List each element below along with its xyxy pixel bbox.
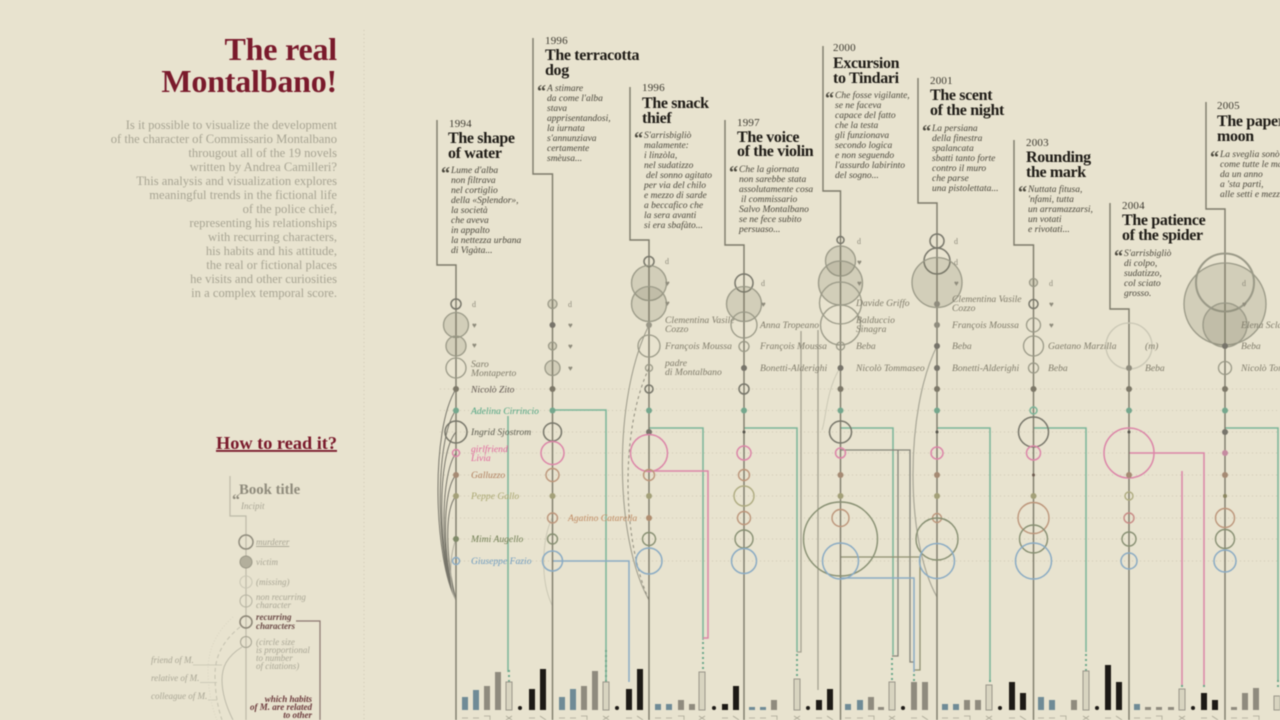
book 2004: The patience of the spider: S'arrisbigliò — [1124, 249, 1172, 259]
relationship arcs — [438, 325, 937, 605]
book 1996: The terracotta dog: Agatino Catarella — [567, 513, 637, 524]
book 2000: Excursion to Tindari: to Tindari — [833, 70, 900, 87]
book 1996: The snack thief: e mezzo di sarde — [644, 191, 707, 201]
book 2000: Excursion to Tindari: d — [857, 237, 861, 246]
book 1994: The shape of water: d — [472, 300, 476, 309]
legend: how to read diagram: which habits — [265, 694, 312, 704]
book 2001: The scent of the night: sbatti tanto forte — [932, 153, 995, 164]
book 1996: The snack thief: malamente: — [644, 141, 689, 151]
book 2001: The scent of the night: La persiana — [931, 124, 978, 134]
title: The real — [225, 31, 337, 67]
legend: how to read diagram: of citations) — [256, 661, 299, 671]
book 1996: The snack thief: Clementina Vasile — [665, 315, 735, 326]
book 1996: The snack thief: del sonno agitato — [646, 171, 712, 181]
book 2005: The paper moon — [1184, 100, 1280, 720]
book 1994: The shape of water: ♥ — [472, 321, 477, 330]
book 1997: The voice of the violin: d — [761, 279, 765, 288]
book 2000: Excursion to Tindari: Che fosse vigilante, — [835, 90, 910, 101]
book 2004: The patience of the spider: col sciato — [1124, 279, 1161, 289]
book 2001: The scent of the night: d — [954, 237, 958, 246]
intro text block: meaningful trends in the fictional life — [149, 188, 337, 202]
intro text block: of the police chief, — [243, 202, 337, 216]
book 2003: Rounding the mark: the mark — [1026, 164, 1086, 181]
legend: how to read diagram: characters — [256, 621, 295, 631]
book 1997: The voice of the violin: Che la giornata — [739, 165, 799, 175]
book 1996: The snack thief — [630, 82, 735, 720]
book 1996: The terracotta dog: ♥ — [568, 364, 573, 373]
book 1997: The voice of the violin: The voice — [737, 129, 799, 146]
book 1994: The shape of water: Lume d'alba — [450, 166, 498, 176]
intro text block: representing his relationships — [189, 216, 337, 230]
bars: book 1997 — [749, 679, 833, 710]
book 2000: Excursion to Tindari: Beba — [856, 341, 876, 352]
title: Montalbano! — [161, 63, 337, 99]
book 2001: The scent of the night: of the night — [930, 102, 1005, 119]
intro text block: througout all of the 19 novels — [188, 146, 337, 160]
book 1994: The shape of water: della «Splendor», — [451, 196, 519, 206]
intro text block: Is it possible to visualize the development — [126, 118, 337, 132]
book 1994: The shape of water: Giuseppe Fazio — [471, 556, 532, 567]
book 1994: The shape of water: che aveva — [451, 216, 489, 226]
book 1996: The terracotta dog: dog — [545, 62, 569, 79]
book 1996: The snack thief: padre — [664, 358, 688, 369]
bars: book 2001 — [942, 682, 1026, 710]
book 1994: The shape of water: Saro — [471, 359, 489, 370]
book 2003: Rounding the mark: un arramazzarsi, — [1028, 205, 1093, 215]
bars: book 2005 — [1231, 688, 1280, 710]
book 1996: The snack thief: François Moussa — [664, 341, 732, 352]
book 2000: Excursion to Tindari: gli funzionava — [835, 130, 889, 141]
book 2004: The patience of the spider: of the spider — [1122, 227, 1203, 244]
book 2001: The scent of the night: d — [954, 258, 958, 267]
book 2004: The patience of the spider: Beba — [1145, 363, 1165, 374]
book 1996: The snack thief: 1996 — [642, 82, 665, 94]
book 2000: Excursion to Tindari: “ — [825, 88, 834, 108]
book 1994: The shape of water: The shape — [448, 130, 515, 147]
bars: book 1996 snack — [655, 672, 739, 710]
heading: how to read it: How to read it? — [216, 433, 337, 453]
book 1994: The shape of water: girlfriend — [471, 444, 508, 455]
book 2000: Excursion to Tindari: Sinagra — [856, 324, 887, 335]
book 1996: The snack thief: ♥ — [665, 299, 670, 308]
book 2001: The scent of the night: ♥ — [954, 279, 959, 288]
book 1996: The terracotta dog: apprisentandosi, — [547, 114, 611, 124]
book 1994: The shape of water: Mimi Augello — [470, 534, 524, 545]
intro text block: the real or fictional places — [206, 258, 337, 272]
bars: book 1996 terracotta — [559, 669, 643, 710]
book 2003: Rounding the mark: d — [1049, 279, 1053, 288]
book 1996: The snack thief: a beccafico che — [644, 200, 703, 211]
book 1994: The shape of water: non filtrava — [451, 175, 496, 186]
book 1994: The shape of water: di Vigàta... — [451, 246, 493, 256]
bar category icons — [462, 716, 1259, 720]
book 2003: Rounding the mark: ♥ — [1049, 321, 1054, 330]
book 2004: The patience of the spider — [1104, 200, 1206, 720]
book 1997: The voice of the violin: il commissario — [741, 195, 797, 205]
bars: book 2000 — [845, 682, 928, 710]
book 1996: The snack thief: d — [665, 257, 669, 266]
book 2005: The paper moon: 2005 — [1217, 100, 1240, 112]
intro text block: of the character of Commissario Montalbano — [111, 132, 337, 146]
book 2000: Excursion to Tindari: Davide Griffo — [855, 298, 910, 309]
legend: how to read diagram: is proportional — [256, 645, 310, 655]
book 1997: The voice of the violin: se ne fece subito — [739, 214, 802, 225]
book 1994: The shape of water: Adelina Cirrincio — [470, 406, 539, 417]
book 1994: The shape of water: la società — [451, 206, 488, 216]
book 2001: The scent of the night: Beba — [952, 341, 972, 352]
book 2005: The paper moon: “ — [1210, 147, 1219, 167]
legend: how to read diagram: (circle size — [256, 637, 295, 647]
book 1997: The voice of the violin: persuaso... — [738, 225, 780, 235]
book 1996: The terracotta dog: A stimare — [546, 84, 583, 94]
legend: how to read diagram: (missing) — [256, 577, 290, 587]
intro text block: in a complex temporal score. — [191, 286, 337, 300]
legend: how to read diagram: “ — [232, 492, 240, 509]
book 2003: Rounding the mark: Gaetano Marzilla — [1048, 341, 1117, 352]
book 2003: Rounding the mark: Nuttata fitusa, — [1027, 184, 1082, 195]
book 1997: The voice of the violin — [725, 117, 827, 720]
book 1997: The voice of the violin: François Moussa — [759, 341, 827, 352]
book 2001: The scent of the night: Bonetti-Alderighi — [952, 363, 1019, 374]
book 2001: The scent of the night: della finestra — [932, 133, 983, 144]
book 2003: Rounding the mark — [1014, 137, 1117, 720]
book 1997: The voice of the violin: “ — [729, 162, 738, 182]
book 1996: The terracotta dog: stava — [547, 104, 567, 114]
book 2003: Rounding the mark: 'nfami, tutta — [1028, 194, 1074, 205]
book 1997: The voice of the violin: Anna Tropeano — [759, 320, 819, 331]
book 2001: The scent of the night: François Moussa — [951, 320, 1019, 331]
book 2000: Excursion to Tindari: secondo logica — [835, 141, 893, 151]
book 2000: Excursion to Tindari — [804, 42, 925, 720]
intro text block: his habits and his attitude, — [206, 244, 337, 258]
legend: how to read diagram: Incipit — [240, 501, 265, 511]
book 1997: The voice of the violin: non sarebbe stata — [739, 175, 806, 185]
book 1996: The snack thief: si era sbafàto... — [644, 220, 703, 231]
book 1994: The shape of water: nel cortiglio — [451, 186, 498, 196]
book 1996: The snack thief: The snack — [642, 95, 709, 112]
book 1994: The shape of water: “ — [441, 163, 450, 183]
connector lines to bar charts — [508, 330, 1278, 690]
book 2000: Excursion to Tindari: ♥ — [857, 279, 862, 288]
book 2000: Excursion to Tindari: capace del fatto — [835, 110, 896, 121]
book 2001: The scent of the night: Clementina Vasile — [952, 294, 1022, 305]
book 2003: Rounding the mark: 2003 — [1026, 137, 1049, 149]
book 2004: The patience of the spider: “ — [1114, 246, 1123, 266]
legend: how to read diagram: friend of M. — [151, 655, 194, 665]
book 1994: The shape of water: of water — [448, 145, 502, 162]
book 2004: The patience of the spider: The patience — [1122, 212, 1206, 229]
book 1996: The terracotta dog: smèusa... — [547, 154, 582, 164]
intro text block — [111, 118, 337, 300]
intro text block: he visits and other curiosities — [190, 272, 337, 286]
bars: book 1994 — [462, 669, 546, 710]
book 1997: The voice of the violin: 1997 — [737, 117, 760, 129]
book 1994: The shape of water — [437, 118, 539, 720]
book 2003: Rounding the mark: e rivotati... — [1028, 225, 1070, 235]
book 2001: The scent of the night: una pistolettata... — [932, 184, 998, 194]
book 2001: The scent of the night: 2001 — [930, 75, 953, 87]
book 1996: The terracotta dog: da come l'alba — [547, 94, 603, 104]
book 1996: The terracotta dog: The terracotta — [545, 47, 640, 64]
book 1996: The terracotta dog: 1996 — [545, 35, 568, 47]
book 1996: The snack thief: nel sudatizzo — [644, 161, 694, 171]
book 1994: The shape of water: Livia — [470, 453, 491, 464]
book 1996: The snack thief: “ — [634, 128, 643, 148]
legend: how to read diagram: of M. are related — [250, 702, 312, 712]
book 1996: The terracotta dog: “ — [537, 81, 546, 101]
book 1997: The voice of the violin: Salvo Montalbano — [739, 205, 809, 215]
row guide lines — [440, 389, 1280, 561]
book 1997: The voice of the violin: Bonetti-Alderighi — [760, 363, 827, 374]
book 2000: Excursion to Tindari: se ne faceva — [835, 100, 882, 111]
intro text block: with recurring characters, — [208, 230, 337, 244]
book 1994: The shape of water: Nicolò Zito — [470, 384, 515, 396]
book 1997: The voice of the violin: assolutamente cosa — [739, 185, 813, 195]
legend: how to read diagram: recurring — [256, 612, 292, 622]
book 1994: The shape of water: Galluzzo — [471, 470, 505, 481]
bars: book 2004 — [1134, 689, 1218, 710]
book 2004: The patience of the spider: sudatizzo, — [1124, 269, 1162, 279]
intro text block: written by Andrea Camilleri? — [190, 160, 337, 174]
book 2005: The paper moon: Beba — [1241, 341, 1261, 352]
book 2000: Excursion to Tindari: ♥ — [857, 258, 862, 267]
book 1994: The shape of water: Montaperto — [470, 368, 517, 379]
book 2001: The scent of the night: “ — [922, 121, 931, 141]
book 1996: The terracotta dog — [533, 35, 640, 720]
intro text block: This analysis and visualization explores — [136, 174, 337, 188]
book 2000: Excursion to Tindari: e non seguendo — [835, 151, 894, 161]
book 2004: The patience of the spider: grosso. — [1124, 289, 1151, 299]
book 1994: The shape of water: ♥ — [472, 341, 477, 350]
legend: how to read diagram: to other — [283, 710, 312, 720]
book 2005: The paper moon: d — [1242, 279, 1246, 288]
legend: how to read diagram: murderer — [256, 537, 290, 547]
book 1996: The snack thief: thief — [642, 110, 672, 127]
book 1996: The snack thief: S'arrisbigliò — [644, 131, 692, 141]
legend: how to read diagram: Book title — [239, 482, 301, 498]
legend: how to read diagram: character — [256, 600, 291, 610]
book 2005: The paper moon: a 'sta parti, — [1220, 180, 1263, 190]
bar charts at the foot of each book — [462, 665, 1280, 720]
book 1994: The shape of water: 1994 — [449, 118, 472, 130]
book 1996: The snack thief: i linzòla, — [644, 151, 677, 161]
book 1996: The snack thief: di Montalbano — [665, 367, 722, 378]
book 2005: The paper moon: moon — [1217, 128, 1254, 145]
book 1996: The terracotta dog: ♥ — [568, 321, 573, 330]
book 2004: The patience of the spider: 2004 — [1122, 200, 1145, 212]
book 2000: Excursion to Tindari: che la testa — [835, 121, 879, 131]
book 2000: Excursion to Tindari: Balduccio — [856, 315, 895, 326]
book 1996: The snack thief: per via del chilo — [643, 181, 706, 191]
legend: how to read diagram — [151, 476, 320, 720]
book 1996: The snack thief: ♥ — [665, 279, 670, 288]
book 2000: Excursion to Tindari: del sogno... — [835, 171, 879, 181]
book 2001: The scent of the night: Cozzo — [952, 303, 976, 314]
book 1997: The voice of the violin: ♥ — [761, 300, 766, 309]
book 2000: Excursion to Tindari: Nicolò Tommaseo — [855, 363, 925, 374]
book 1994: The shape of water: la nettezza urbana — [451, 236, 521, 246]
book 2001: The scent of the night: spalancata — [932, 144, 974, 154]
book 2004: The patience of the spider: di colpo, — [1124, 259, 1157, 269]
book 1994: The shape of water: Ingrid Sjostrom — [470, 427, 531, 438]
bars: book 2003 — [1038, 665, 1122, 710]
book 2003: Rounding the mark: Beba — [1048, 363, 1068, 374]
book 2000: Excursion to Tindari: Excursion — [833, 55, 900, 72]
book 1996: The terracotta dog: ♥ — [568, 342, 573, 351]
book 2005: The paper moon: ♥ — [1242, 300, 1247, 309]
legend: how to read diagram: to number — [256, 653, 293, 663]
book 1996: The snack thief: Cozzo — [665, 324, 689, 335]
book 2001: The scent of the night — [912, 75, 1022, 720]
title — [161, 31, 337, 99]
legend: how to read diagram: non recurring — [256, 592, 306, 602]
book 2003: Rounding the mark: Rounding — [1026, 149, 1091, 166]
book 2003: Rounding the mark: ♥ — [1049, 300, 1054, 309]
book 2003: Rounding the mark: un votati — [1028, 215, 1062, 225]
book 1996: The terracotta dog: d — [568, 300, 572, 309]
book 1996: The terracotta dog: s'annunziava — [547, 134, 597, 144]
book 1997: The voice of the violin: of the violin — [737, 143, 814, 160]
book 2004: The patience of the spider: (m) — [1145, 341, 1158, 352]
legend: how to read diagram: relative of M. — [151, 673, 199, 683]
book 1994: The shape of water: in appalto — [451, 226, 490, 236]
book 1996: The snack thief: la sera avanti — [644, 211, 697, 221]
book 1994: The shape of water: Peppe Gallo — [470, 491, 519, 502]
book 1996: The terracotta dog: la iurnata — [547, 124, 585, 134]
legend: how to read diagram: colleague of M. — [151, 691, 207, 701]
book 2003: Rounding the mark: “ — [1018, 182, 1027, 202]
book 2000: Excursion to Tindari: 2000 — [833, 42, 856, 54]
book 2001: The scent of the night: contro il muro — [932, 164, 986, 174]
book 2001: The scent of the night: che parse — [932, 174, 969, 184]
book 2000: Excursion to Tindari: l'assurdo labirinto — [835, 161, 905, 171]
legend: how to read diagram: victim — [256, 557, 278, 567]
book 2005: The paper moon: da un anno — [1220, 170, 1263, 180]
book 1996: The terracotta dog: certamente — [547, 144, 589, 154]
book 2001: The scent of the night: The scent — [930, 87, 993, 104]
